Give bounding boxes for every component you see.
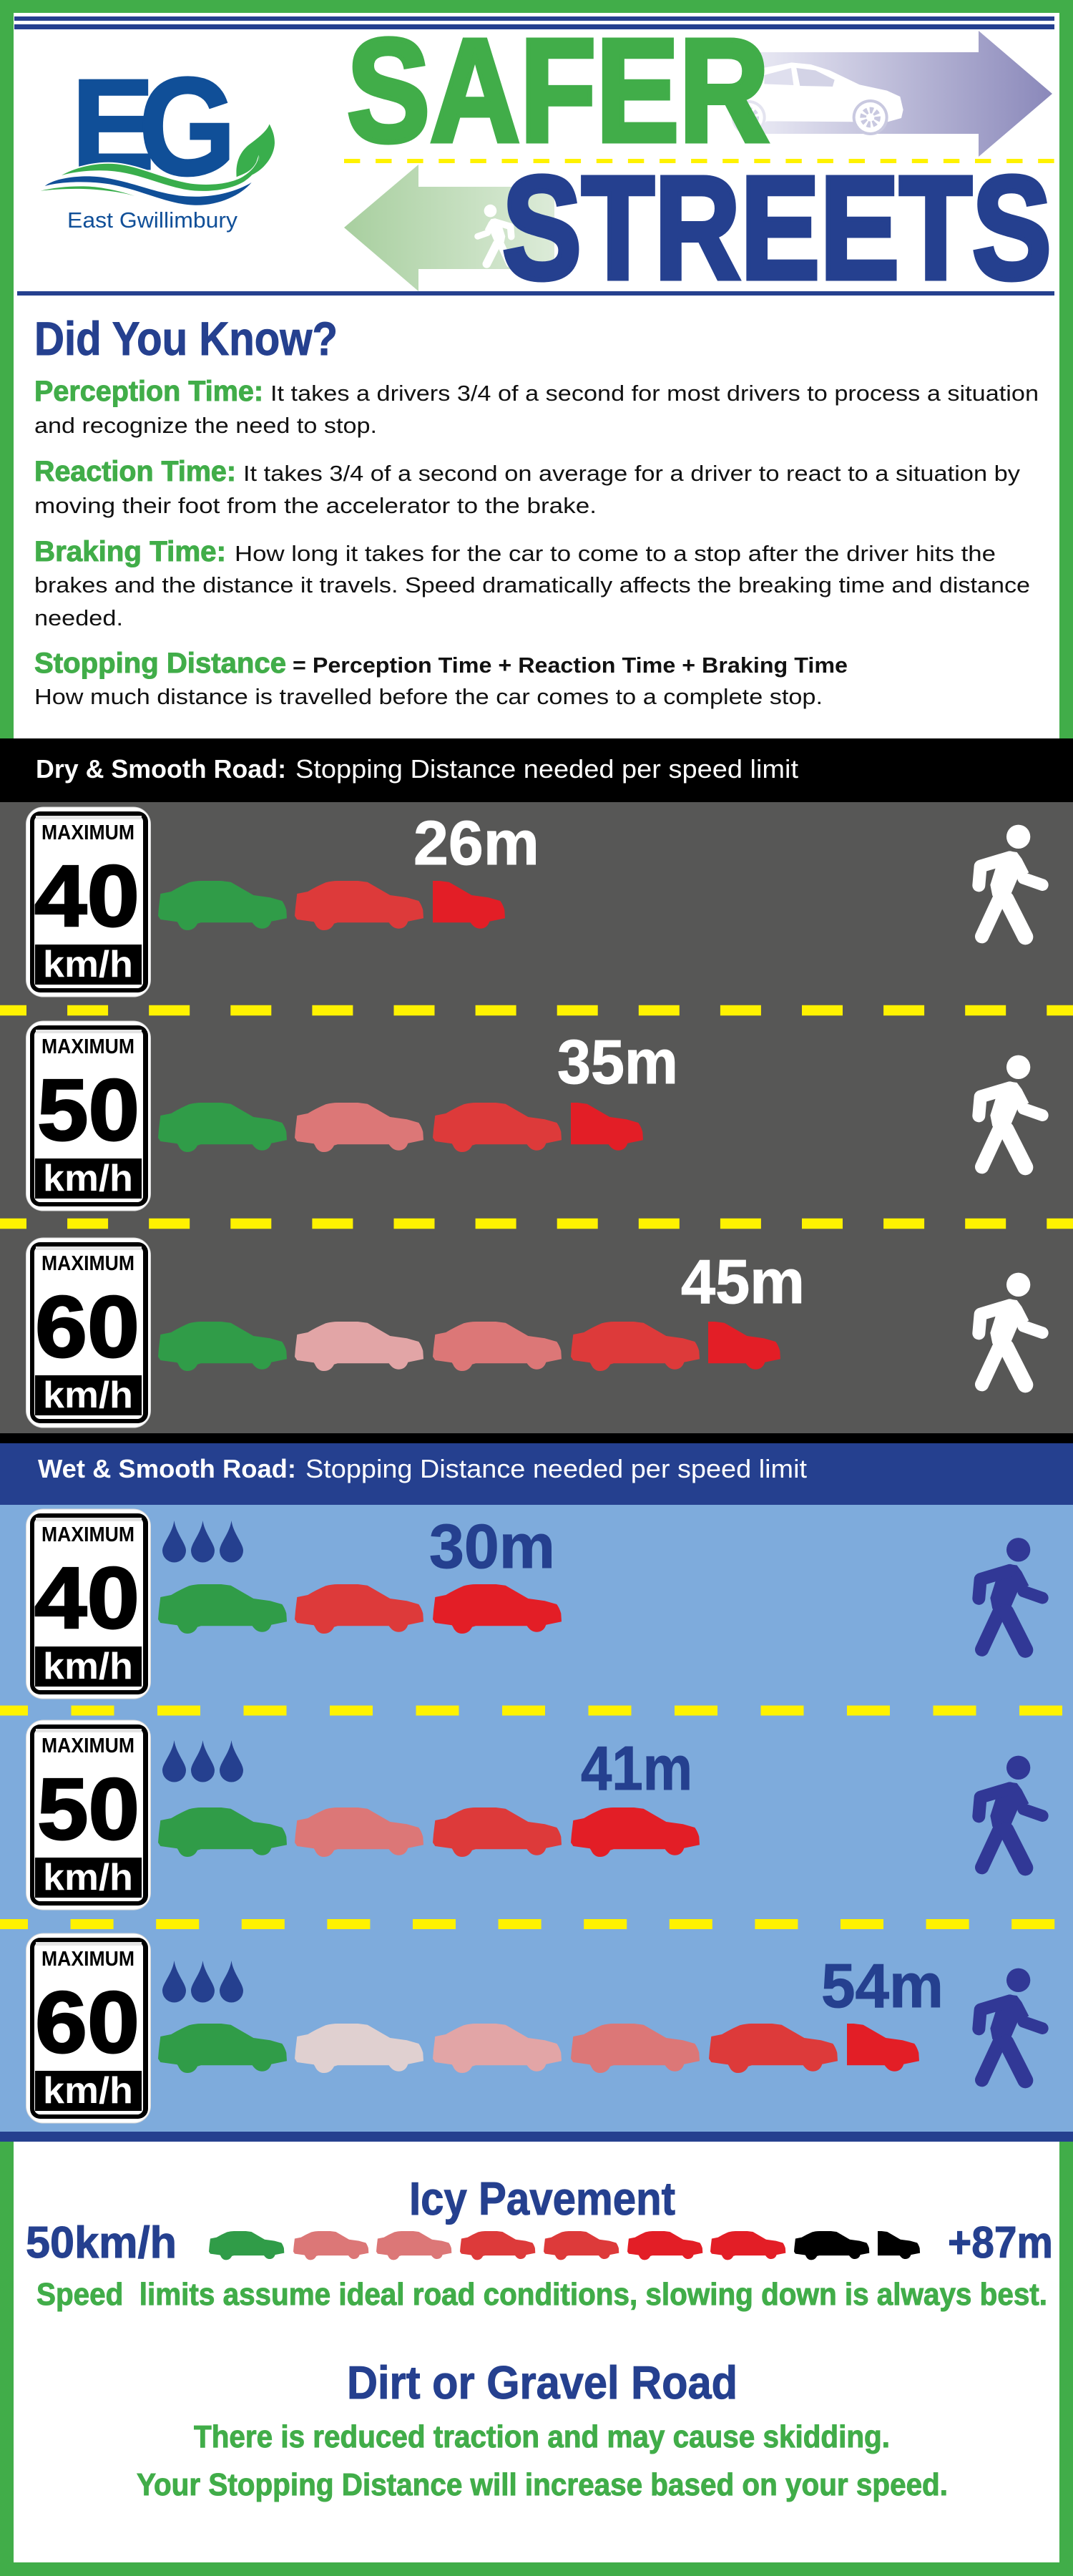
wet band heading: Stopping Distance needed per speed limit	[305, 1454, 807, 1483]
dry road surface	[0, 802, 1073, 1433]
dry lane dashes 2	[0, 1219, 1073, 1229]
text block: braking time: brakes and the distance it travels. Speed dramatically affects the breaking time and distance	[34, 572, 1030, 597]
wet band heading	[0, 1443, 1073, 1505]
sign: 40	[26, 807, 150, 997]
cars: 50 dry	[158, 1103, 643, 1152]
dry band heading: Stopping Distance needed per speed limit	[295, 754, 798, 784]
logo: East Gwillimbury: E	[72, 53, 155, 197]
wet road surface	[0, 1505, 1073, 2132]
text: reduced traction: There is reduced traction and may cause skidding.	[194, 2419, 890, 2454]
blue closing band	[0, 2132, 1073, 2142]
logo: East Gwillimbury	[41, 49, 275, 233]
text block: reaction time	[34, 456, 1021, 518]
sign: 50 wet: km/h	[43, 1857, 133, 1898]
icon: pedestrian	[979, 1273, 1042, 1385]
cars: 60 wet	[158, 2024, 919, 2073]
cars: 40 wet	[158, 1584, 562, 1634]
distance: 41m: 41m	[581, 1734, 692, 1803]
heading: Dirt or Gravel Road: Dirt or Gravel Road	[347, 2356, 738, 2409]
wet lane dashes 2	[0, 1919, 1056, 1929]
sign: 60: km/h	[43, 1375, 133, 1416]
sign: 50: km/h	[43, 1158, 133, 1199]
label: +87m: +87m	[948, 2218, 1053, 2268]
dry band heading	[0, 738, 1073, 802]
header rule lines	[14, 16, 1054, 296]
sign: 40 wet: MAXIMUM	[41, 1523, 134, 1546]
text block: braking time	[34, 536, 1030, 630]
distance: 45m: 45m	[681, 1247, 805, 1317]
panel: dry road	[0, 738, 1073, 1433]
sign: 60	[26, 1238, 150, 1428]
distance: 30m: 30m	[429, 1512, 555, 1581]
sign: 40: 40	[34, 847, 139, 945]
sign: 50 wet	[26, 1720, 150, 1910]
label: 50km/h: 50km/h	[26, 2218, 177, 2268]
distance: 54m: 54m	[821, 1951, 944, 2021]
logo: East Gwillimbury: G	[139, 49, 236, 205]
heading: Icy Pavement: Icy Pavement	[409, 2172, 675, 2225]
wet band heading: Wet & Smooth Road:	[38, 1454, 296, 1483]
dry band heading: Dry & Smooth Road:	[36, 754, 286, 784]
text: stopping distance increase: Your Stopping Distance will increase based on your speed.	[137, 2467, 948, 2502]
sign: 50 wet: 50	[37, 1760, 139, 1858]
sign: 50: 50	[37, 1061, 139, 1158]
icon: pedestrian	[979, 1055, 1042, 1167]
cars: 40 dry	[158, 881, 505, 930]
text block: stopping distance	[34, 648, 848, 709]
wet lane dashes 1	[0, 1706, 1073, 1716]
sign: 60 wet: km/h	[43, 2070, 133, 2112]
panel: wet road	[0, 1443, 1073, 2132]
sign: 40 wet: 40	[34, 1549, 139, 1646]
sign: 50	[26, 1021, 150, 1211]
sign: 60 wet: 60	[35, 1974, 139, 2071]
text block: braking time: needed.	[34, 605, 123, 630]
icon: pedestrian	[979, 825, 1042, 937]
cars: 50 wet	[158, 1807, 700, 1857]
sign: 60: 60	[35, 1278, 139, 1375]
icon: pedestrian	[979, 1538, 1042, 1650]
sign: 60 wet: MAXIMUM	[41, 1948, 134, 1971]
icon: water drops	[162, 1521, 243, 1563]
text block: reaction time: Reaction Time:	[34, 456, 236, 487]
sign: 50 wet: MAXIMUM	[41, 1735, 134, 1757]
heading: Did You Know?: Did You Know?	[34, 312, 338, 365]
icon: water drops	[162, 1961, 243, 2002]
sign: 40: km/h	[43, 944, 133, 985]
distance: 26m: 26m	[413, 809, 539, 878]
sign: 50: MAXIMUM	[41, 1035, 134, 1058]
black separator	[0, 1433, 1073, 1443]
text block: perception time: It takes a drivers 3/4 of a second for most drivers to process a situation	[270, 381, 1039, 406]
sign: 40: MAXIMUM	[41, 821, 134, 844]
icon: water drops	[162, 1740, 243, 1782]
text block: perception time: Perception Time:	[34, 376, 263, 407]
sign: 60: MAXIMUM	[41, 1252, 134, 1275]
distance: 35m: 35m	[557, 1028, 678, 1097]
cars: icy pavement	[209, 2231, 920, 2260]
icon: pedestrian in arrow	[478, 205, 511, 264]
text block: reaction time: It takes 3/4 of a second on average for a driver to react to a situation by	[243, 461, 1021, 486]
arrow: left-pointing green with pedestrian	[344, 165, 554, 291]
icon: pedestrian	[979, 1756, 1042, 1868]
sign: 40 wet	[26, 1509, 150, 1699]
text block: reaction time: moving their foot from the accelerator to the brake.	[34, 493, 597, 518]
sign: 40 wet: km/h	[43, 1646, 133, 1687]
text block: braking time: Braking Time:	[34, 536, 226, 567]
text block: stopping distance: Stopping Distance	[34, 648, 286, 679]
dry lane dashes 1	[0, 1005, 1073, 1015]
text block: perception time: and recognize the need to stop.	[34, 413, 377, 438]
text block: stopping distance: = Perception Time + Reaction Time + Braking Time	[293, 653, 848, 678]
icon: pedestrian	[979, 1968, 1042, 2080]
icon: white car	[732, 62, 903, 135]
logo: East Gwillimbury: East Gwillimbury	[67, 208, 238, 233]
cars: 60 dry	[158, 1322, 780, 1371]
arrow: right-pointing purple with car	[732, 31, 1052, 157]
divider: header yellow dashes	[344, 159, 1054, 163]
title: SAFER: SAFER	[347, 9, 769, 172]
text block: perception time	[34, 376, 1039, 438]
text block: braking time: How long it takes for the car to come to a stop after the driver hits the	[235, 541, 996, 566]
sign: 60 wet	[26, 1933, 150, 2123]
text block: stopping distance: How much distance is travelled before the car comes to a complete stop.	[34, 684, 823, 709]
